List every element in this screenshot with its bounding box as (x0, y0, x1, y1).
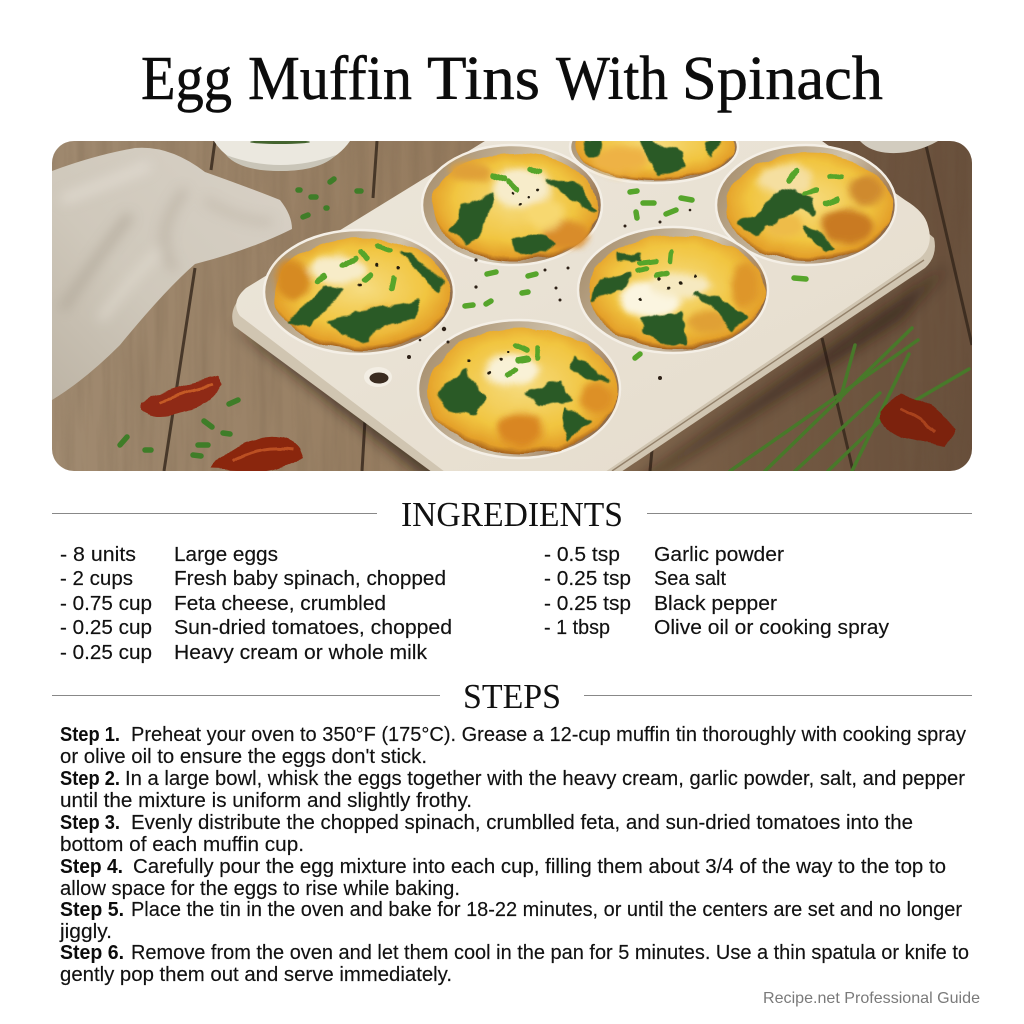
ingredients list left: Sun-dried tomatoes, chopped (174, 617, 452, 639)
ingredients list right: Garlic powder (654, 544, 784, 566)
ingredients list right: - 0.25 tsp (544, 593, 631, 615)
ingredients list left: Heavy cream or whole milk (174, 642, 428, 664)
steps text: Step 3. (60, 812, 120, 834)
ingredients list right: Sea salt (654, 568, 726, 590)
egg muffin 5 (588, 235, 764, 349)
steps text: bottom of each muffin cup. (60, 834, 304, 856)
tin hole (364, 367, 392, 387)
ingredients list left: - 0.25 cup (60, 642, 152, 664)
small bowl top (214, 140, 350, 171)
title: Muffin (248, 45, 412, 113)
heading: ingredients: INGREDIENTS (401, 495, 623, 534)
chives on table (730, 328, 969, 471)
ingredients list left: Feta cheese, crumbled (174, 593, 386, 615)
steps text: allow space for the eggs to rise while baking. (60, 878, 460, 900)
steps text: Step 2. (60, 768, 120, 790)
egg muffin 6 (428, 328, 616, 454)
egg muffin 2 (575, 141, 736, 181)
ingredients list left: - 0.75 cup (60, 593, 152, 615)
scattered pepper (407, 209, 691, 380)
egg muffin 4 (274, 238, 450, 350)
steps text: or olive oil to ensure the eggs don't stick. (60, 746, 427, 768)
muffin tin (232, 141, 935, 471)
steps text: gently pop them out and serve immediately. (60, 964, 452, 986)
title: Tins (427, 45, 540, 113)
steps text: jiggly. (59, 921, 112, 943)
scattered chives on tin (465, 191, 806, 358)
tin shadow (236, 270, 942, 471)
steps text: Step 5. (60, 899, 124, 921)
ingredients list right: Black pepper (654, 593, 777, 615)
ingredients list right (544, 544, 889, 639)
steps text: Carefully pour the egg mixture into each cup, filling them about 3/4 of the way to the top to (133, 856, 946, 878)
ingredients list left: - 0.25 cup (60, 617, 152, 639)
ingredients list left: - 8 units (60, 544, 136, 566)
towel (52, 148, 292, 400)
muffin cups (264, 111, 896, 458)
steps text: Step 4. (60, 856, 123, 878)
steps text: Step 1. (60, 724, 120, 746)
heading: steps: STEPS (463, 677, 561, 716)
ingredients list left (60, 544, 452, 664)
title (141, 45, 883, 113)
steps text: Step 6. (60, 942, 124, 964)
ingredients list right: - 1 tbsp (544, 617, 610, 639)
sun-dried tomatoes (141, 376, 956, 472)
chive bits on table (120, 179, 361, 456)
ingredients list right: - 0.25 tsp (544, 568, 631, 590)
ingredients list left: Large eggs (174, 544, 278, 566)
egg muffin 1 (432, 153, 598, 261)
steps text: Evenly distribute the chopped spinach, crumblled feta, and sun-dried tomatoes into the (131, 812, 913, 834)
steps text: Preheat your oven to 350°F (175°C). Grease a 12-cup muffin tin thoroughly with cooking spray (131, 724, 966, 746)
ingredients list left: - 2 cups (60, 568, 133, 590)
steps text: Remove from the oven and let them cool in the pan for 5 minutes. Use a thin spatula or knife to (131, 942, 969, 964)
title: Egg (141, 45, 232, 113)
ingredients list right: - 0.5 tsp (544, 544, 620, 566)
ingredients list right: Olive oil or cooking spray (654, 617, 889, 639)
title: Spinach (682, 45, 883, 113)
title: With (556, 45, 668, 113)
footer credit: Recipe.net Professional Guide (763, 990, 980, 1007)
steps text: until the mixture is uniform and slightly frothy. (60, 790, 472, 812)
steps text (59, 724, 969, 986)
ingredients list left: Fresh baby spinach, chopped (174, 568, 446, 590)
steps text: In a large bowl, whisk the eggs together with the heavy cream, garlic powder, salt, and pepper (125, 768, 965, 790)
bowl top right (860, 141, 938, 153)
steps text: Place the tin in the oven and bake for 18-22 minutes, or until the centers are set and no longer (131, 899, 962, 921)
wooden table (52, 141, 972, 471)
panel: recipe photo (52, 141, 972, 471)
egg muffin 3 (726, 153, 892, 261)
